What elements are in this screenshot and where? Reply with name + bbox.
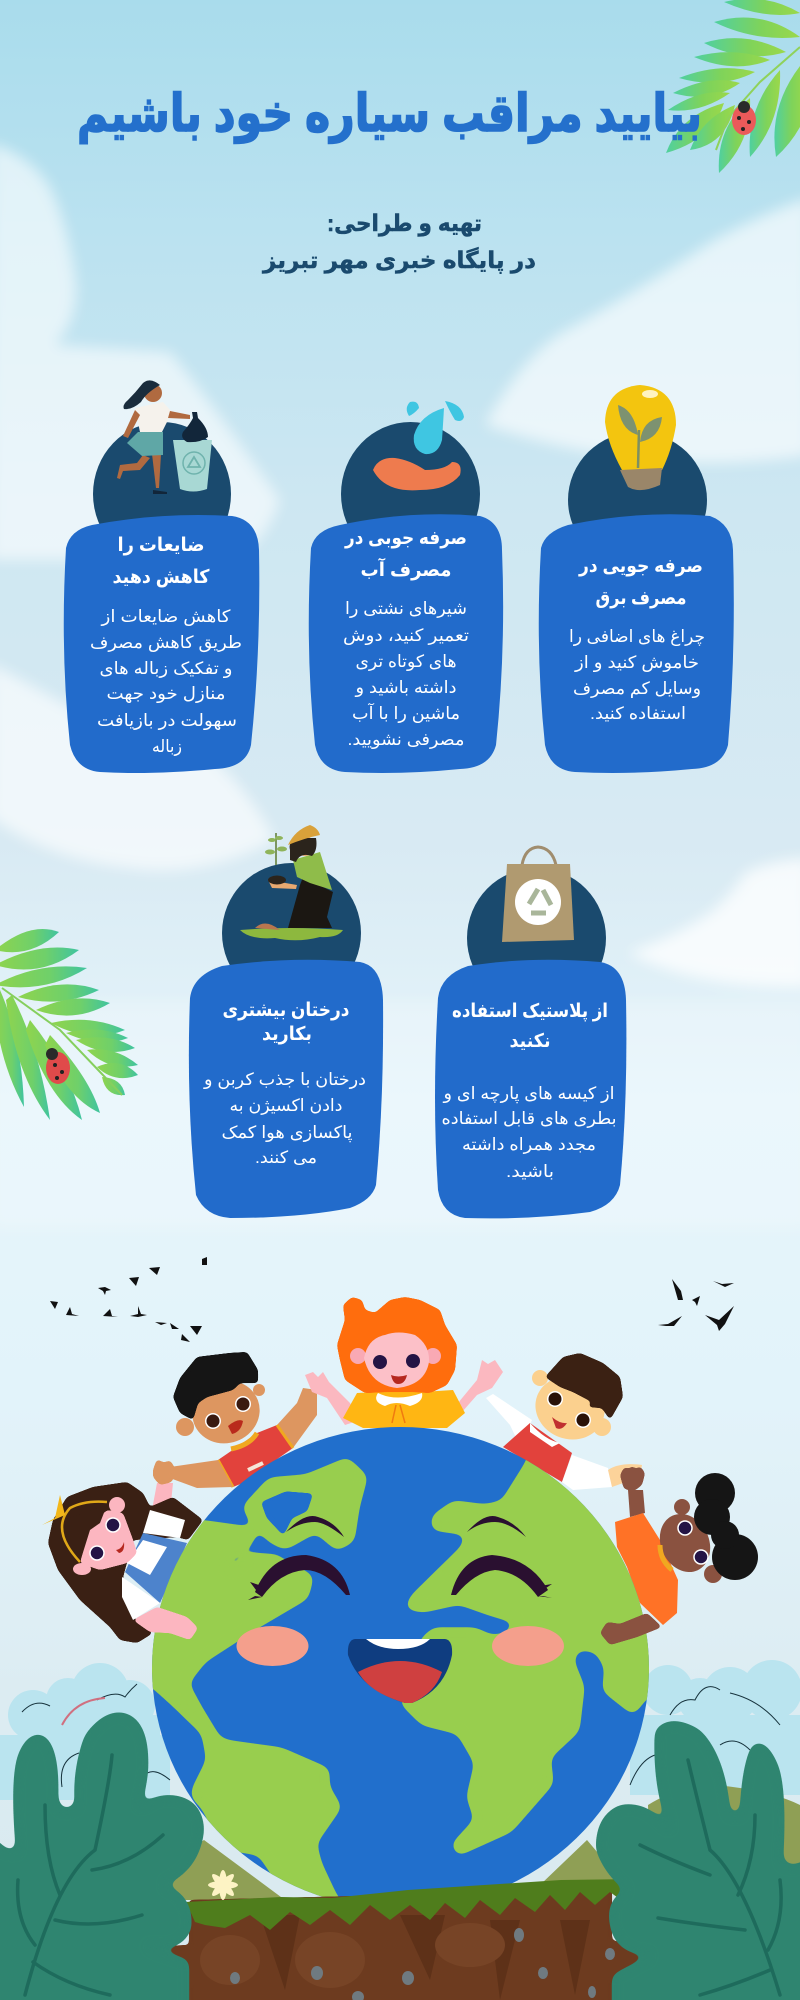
card: save electricity xyxy=(539,514,734,773)
subtitle: تهیه و طراحی: xyxy=(327,210,482,237)
card body: avoid plastic: بطری های قابل استفاده xyxy=(442,1109,616,1128)
globe xyxy=(152,1427,649,1897)
card title: reduce waste: ضایعات را xyxy=(118,535,204,556)
card body: save water: های کوتاه تری xyxy=(356,652,456,671)
birds left flock xyxy=(50,1257,207,1342)
icon: light bulb with leaves xyxy=(605,385,676,490)
circle behind water icon xyxy=(341,422,480,566)
bush outline arcs xyxy=(22,1684,780,1787)
decorative red scribble xyxy=(62,1698,105,1725)
top right palm leaf xyxy=(666,0,800,173)
card title: avoid plastic: نکنید xyxy=(510,1031,550,1052)
card body: save electricity: وسایل کم مصرف xyxy=(573,679,701,699)
pale blue bushes xyxy=(0,1660,800,1800)
card title: save electricity: صرفه جویی در xyxy=(578,556,703,577)
card body: avoid plastic: مجدد همراه داشته xyxy=(462,1135,596,1154)
olive hills xyxy=(135,1785,800,1900)
land: right continent xyxy=(403,1430,690,1853)
card title: save electricity: مصرف برق xyxy=(596,588,686,609)
right foliage plant xyxy=(596,1721,800,2000)
card body: save water: داشته باشید و xyxy=(354,678,456,697)
circle behind gardener icon xyxy=(222,863,361,1003)
girl with orange hair xyxy=(305,1297,503,1428)
card body: plant trees: می کنند. xyxy=(255,1148,317,1167)
background clouds xyxy=(0,143,800,1230)
card body: save water xyxy=(343,599,469,749)
card body: save electricity: استفاده کنید. xyxy=(590,704,686,723)
front arm: girl left xyxy=(133,1607,198,1640)
card: save water xyxy=(309,514,503,773)
boy with brown hair xyxy=(486,1353,642,1490)
card title: save water: مصرف آب xyxy=(360,557,452,581)
circle behind electricity icon xyxy=(568,432,707,568)
subtitle xyxy=(262,210,536,274)
card title: reduce waste xyxy=(112,535,210,588)
circle behind bag icon xyxy=(467,868,606,1008)
card body: plant trees xyxy=(203,1070,366,1167)
icon: hand with water drop xyxy=(373,401,464,490)
card body: save water: تعمیر کنید، دوش xyxy=(343,626,469,645)
birds right flock xyxy=(658,1279,734,1331)
card title: plant trees: بکارید xyxy=(262,1024,312,1045)
card body: reduce waste: زباله xyxy=(152,737,182,756)
card title: avoid plastic xyxy=(452,1001,608,1052)
card title: save electricity xyxy=(578,556,703,609)
closed eyes and lashes xyxy=(248,1516,552,1600)
card body: reduce waste: منازل خود جهت xyxy=(106,684,226,704)
card body: save water: ماشین را با آب xyxy=(352,702,460,723)
card body: reduce waste xyxy=(90,607,242,756)
card body: save water: شیرهای نشتی را xyxy=(345,599,467,618)
card body: reduce waste: و تفکیک زباله های xyxy=(100,659,232,678)
card body: save electricity xyxy=(569,627,705,723)
soil cliff xyxy=(105,1890,694,2000)
card: plant trees xyxy=(189,960,383,1218)
card body: plant trees: دادن اکسیژن به xyxy=(230,1096,342,1115)
land: upper left continent xyxy=(245,1460,365,1548)
card title: save water: صرفه جوبی در xyxy=(344,528,467,549)
icon: gardener planting a tree xyxy=(240,825,343,940)
icon: woman with trash bag and bin xyxy=(117,380,212,494)
icon: recycled paper bag xyxy=(502,847,574,942)
card: avoid plastic xyxy=(435,960,626,1218)
girl with brown hair xyxy=(42,1482,203,1643)
card body: plant trees: پاکسازی هوا کمک xyxy=(222,1123,353,1143)
card body: plant trees: درختان با جذب کربن و xyxy=(203,1070,366,1089)
blush cheeks xyxy=(236,1626,564,1666)
grass strip xyxy=(186,1879,666,1930)
daisy flower xyxy=(208,1870,238,1900)
circle behind waste icon xyxy=(93,422,231,566)
card title: save water xyxy=(344,528,467,581)
lake on upper left continent xyxy=(263,1493,311,1533)
ladybug left xyxy=(46,1048,70,1084)
left palm leaf xyxy=(0,929,138,1120)
card title: plant trees xyxy=(222,1000,350,1045)
card body: reduce waste: کاهش ضایعات از xyxy=(100,607,231,626)
boy with dark hair xyxy=(153,1352,317,1488)
card body: avoid plastic: باشید. xyxy=(506,1162,554,1181)
girl with curly hair xyxy=(615,1465,758,1625)
ladybug top xyxy=(732,101,756,135)
smiling mouth xyxy=(348,1639,452,1703)
card body: avoid plastic: از کیسه های پارچه ای و xyxy=(442,1084,614,1104)
card body: save electricity: چراغ های اضافی را xyxy=(569,627,705,647)
land: left continent xyxy=(120,1515,350,1920)
card body: reduce waste: سهولت در بازیافت xyxy=(97,711,237,731)
card body: save electricity: خاموش کنید و از xyxy=(574,653,699,672)
card: reduce waste xyxy=(64,515,259,773)
subtitle: در پایگاه خبری مهر تبریز xyxy=(262,247,536,274)
card body: reduce waste: طریق کاهش مصرف xyxy=(90,633,242,652)
card body: save water: مصرفی نشویید. xyxy=(348,730,464,749)
card body: avoid plastic xyxy=(442,1084,616,1181)
left foliage plant xyxy=(0,1712,204,2000)
card title: avoid plastic: از پلاستیک استفاده xyxy=(452,1001,608,1022)
card title: reduce waste: کاهش دهید xyxy=(112,567,210,588)
card title: plant trees: درختان بیشتری xyxy=(222,1000,350,1021)
front arm: girl right xyxy=(600,1613,662,1645)
